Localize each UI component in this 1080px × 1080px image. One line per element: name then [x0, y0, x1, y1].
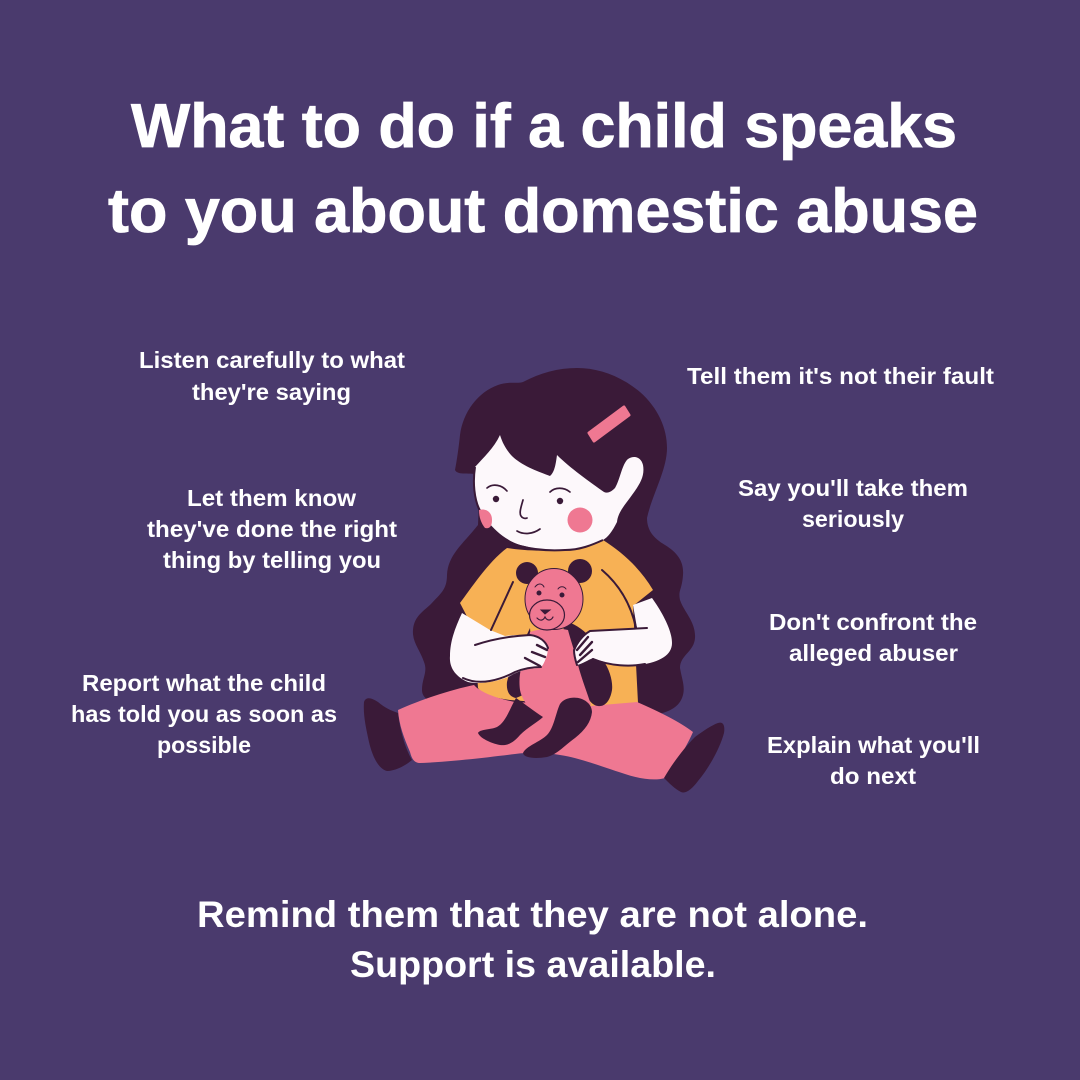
left arm — [450, 613, 548, 683]
right cheek — [568, 508, 592, 532]
tip: don't confront: Don't confront the — [769, 609, 977, 635]
bear left leg — [478, 698, 543, 745]
right arm lines — [574, 570, 647, 666]
right arm — [575, 598, 672, 666]
tip: let them know — [147, 485, 397, 573]
tip: report: possible — [157, 732, 251, 758]
tip: let them know: Let them know — [187, 485, 357, 511]
right foot — [664, 723, 724, 792]
tip: not their fault: Tell them it's not their fault — [687, 363, 994, 389]
closing message — [197, 894, 868, 985]
illustration: child holding teddy bear — [364, 368, 724, 792]
shirt — [460, 540, 653, 707]
tip: explain next: Explain what you'll — [767, 732, 980, 758]
face and collar outline — [474, 467, 603, 550]
tip: explain next — [767, 732, 980, 789]
tip: take them seriously — [738, 475, 968, 532]
tip: don't confront — [769, 609, 977, 666]
closing message: Remind them that they are not alone. — [197, 894, 868, 935]
pants — [398, 685, 693, 779]
tip: let them know: thing by telling you — [163, 547, 381, 573]
tip: let them know: they've done the right — [147, 516, 397, 542]
bear right leg — [523, 698, 592, 758]
tip: listen carefully: Listen carefully to what — [139, 347, 405, 373]
closing message: Support is available. — [350, 944, 716, 985]
left arm lines — [463, 582, 548, 682]
bear muzzle — [530, 600, 564, 630]
tip: listen carefully: they're saying — [192, 379, 351, 405]
left foot — [364, 698, 412, 771]
tip: take them seriously: Say you'll take them — [738, 475, 968, 501]
tip: report — [71, 670, 337, 758]
title: to you about domestic abuse — [108, 177, 978, 246]
tip: report: Report what the child — [82, 670, 326, 696]
eyes, nose and smile — [487, 485, 570, 533]
hair clip — [589, 407, 629, 441]
bear face — [535, 584, 566, 620]
tip: listen carefully — [139, 347, 405, 405]
bear arms — [563, 620, 612, 706]
bear head — [525, 568, 583, 630]
tip: explain next: do next — [830, 763, 916, 789]
tip: report: has told you as soon as — [71, 701, 337, 727]
hair — [413, 368, 695, 715]
tip: take them seriously: seriously — [802, 506, 904, 532]
title: What to do if a child speaks — [131, 92, 957, 161]
left cheek — [479, 510, 492, 528]
bear ears — [516, 562, 538, 584]
face — [474, 435, 643, 550]
tip: don't confront: alleged abuser — [789, 640, 958, 666]
bear body — [519, 629, 591, 716]
title — [108, 92, 978, 246]
